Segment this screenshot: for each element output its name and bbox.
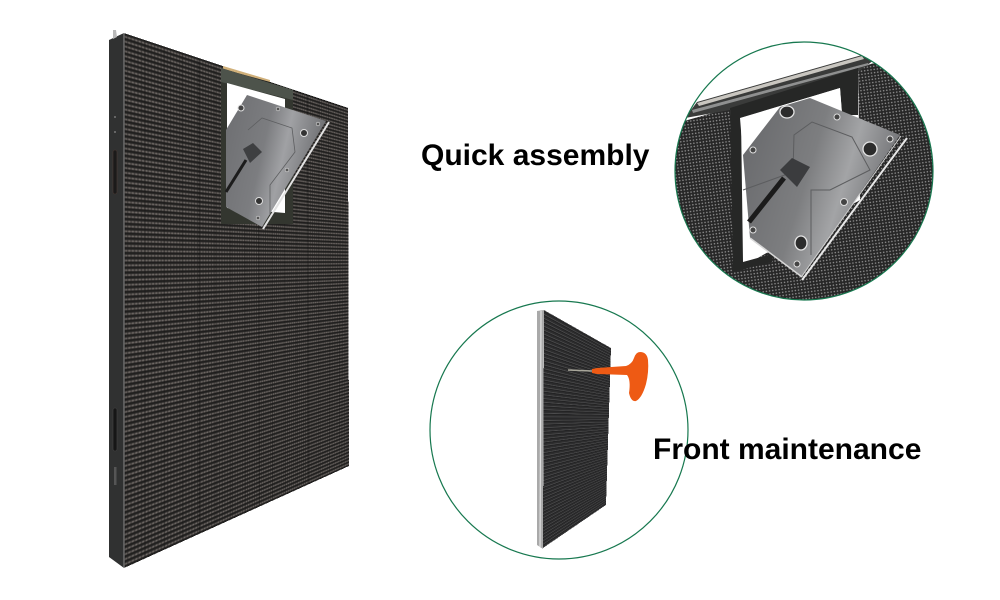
window opening with pulled-out module	[221, 66, 330, 230]
cable and connector	[226, 160, 246, 192]
panel: main LED cabinet	[109, 30, 349, 568]
pulled-out module	[226, 95, 329, 229]
circle: front maintenance close-up	[429, 300, 689, 560]
LED surface	[676, 110, 740, 282]
connector and cable	[749, 178, 784, 222]
circle: quick assembly close-up	[674, 41, 934, 301]
front LED face	[124, 34, 349, 568]
heading: Front maintenance: Front maintenance	[653, 433, 921, 466]
frame bar	[685, 55, 874, 118]
small LED panel	[543, 310, 611, 548]
screws	[780, 106, 794, 118]
module	[743, 98, 900, 277]
icon: orange T-handle screwdriver	[568, 352, 648, 402]
circle outline	[429, 300, 689, 560]
heading: Quick assembly: Quick assembly	[421, 139, 649, 172]
side of cabinet	[109, 30, 327, 568]
